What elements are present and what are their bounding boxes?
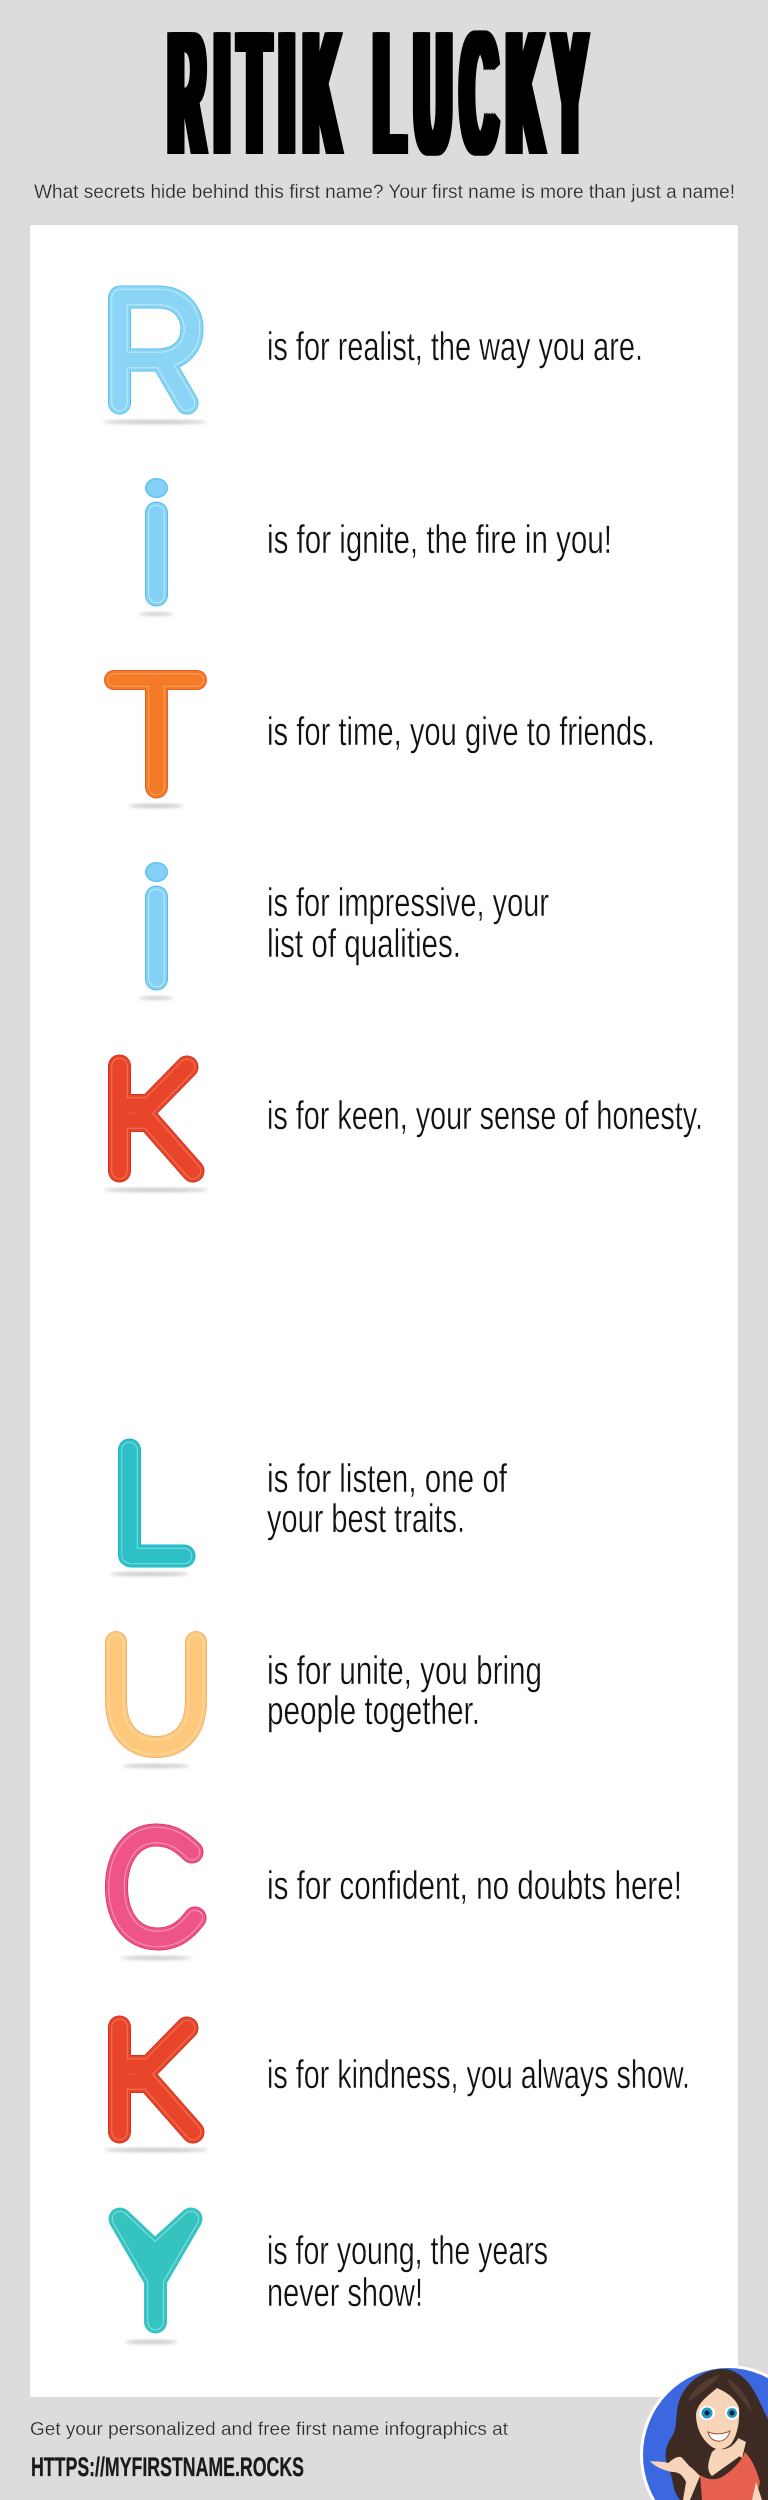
subtitle: What secrets hide behind this first name? Your first name is more than just a name! — [34, 181, 735, 203]
shirt — [700, 2452, 760, 2500]
row: T — [114, 680, 655, 808]
text — [267, 1457, 508, 1541]
row: R — [103, 297, 643, 424]
row: K — [104, 1066, 703, 1192]
text: your best traits. — [267, 1497, 465, 1541]
text — [267, 2229, 548, 2315]
text: is for impressive, your — [267, 881, 549, 925]
text: is for unite, you bring — [267, 1649, 542, 1693]
text: never show! — [267, 2271, 423, 2315]
text: is for listen, one of — [267, 1457, 508, 1501]
row: Y — [120, 2219, 548, 2344]
row: L — [110, 1450, 508, 1576]
icon: avatar — [640, 2365, 768, 2500]
footer url: HTTPS://MYFIRSTNAME.ROCKS — [31, 2452, 304, 2482]
eyes — [699, 2406, 715, 2420]
text — [267, 1649, 542, 1733]
footer text: Get your personalized and free first name infographics at — [30, 2418, 508, 2439]
text — [267, 881, 549, 966]
mouth — [708, 2431, 730, 2441]
row: U — [116, 1642, 542, 1768]
row: K — [104, 2027, 690, 2152]
row: i — [139, 862, 549, 999]
text: list of qualities. — [267, 922, 461, 966]
arm — [752, 2482, 762, 2500]
face — [696, 2388, 739, 2449]
text: is for ignite, the fire in you! — [267, 518, 612, 562]
neck — [708, 2440, 742, 2476]
text: is for young, the years — [267, 2229, 548, 2273]
row: C — [116, 1835, 682, 1960]
text: people together. — [267, 1689, 480, 1733]
row: i — [139, 478, 612, 615]
